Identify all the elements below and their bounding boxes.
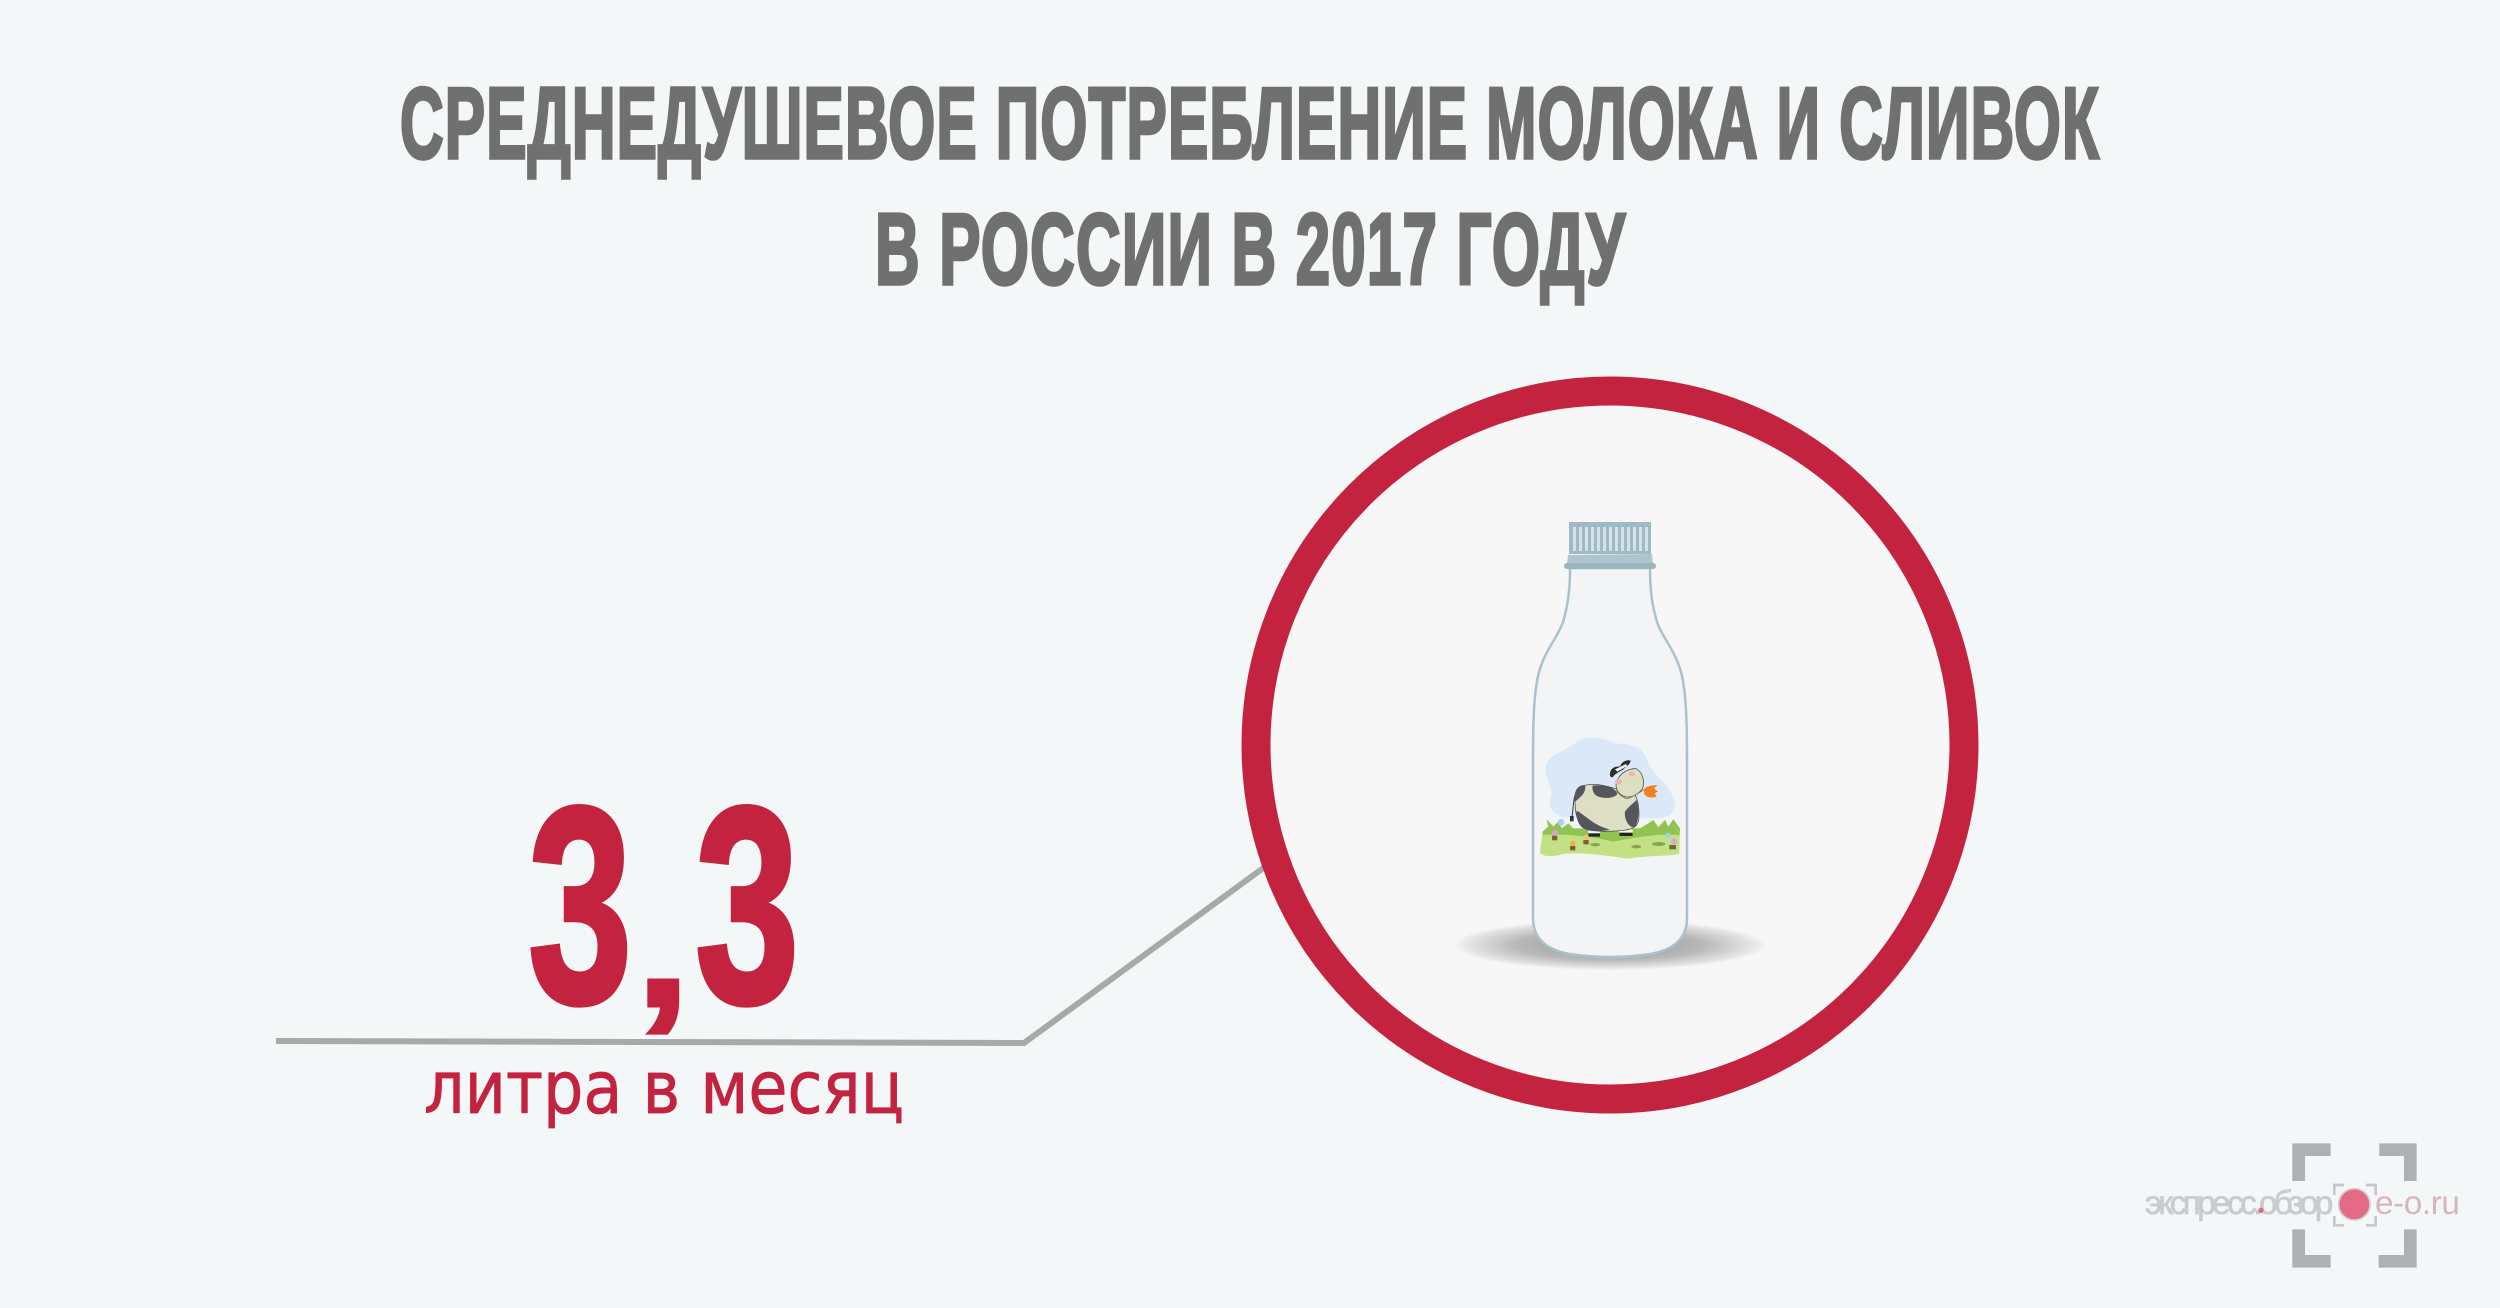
logo dot [2258,1208,2264,1213]
tail [1572,795,1575,818]
circle [1256,391,1964,1099]
connector line [276,866,1266,1043]
rope [1616,789,1645,798]
cow head [1616,769,1644,797]
logo inner corners [2334,1185,2376,1225]
tulip [1644,785,1658,797]
big number: 3 [695,748,799,1062]
title: В РОССИИ В 2017 ГОДУ [875,194,1626,306]
label: cow on meadow [1540,737,1680,859]
unit label: литра в месяц [424,1046,904,1131]
logo text: domain: e-o.ru [2375,1185,2460,1222]
cow spots [1575,785,1638,831]
logo frame corners [2292,1143,2417,1268]
cow hair [1610,760,1631,777]
watermark logo [2145,1143,2460,1268]
hooves [1588,829,1600,837]
bottle body [1533,568,1687,957]
bottle shadow [1455,920,1765,970]
icon: milk bottle [1455,522,1765,970]
bottle cap [1564,522,1656,569]
title [400,68,2100,306]
logo lens [2339,1189,2370,1220]
logo text: cyrillic: экспресс.обзор [2145,1185,2333,1222]
grass [1540,819,1680,859]
cow body [1575,784,1639,831]
big number [528,748,799,1062]
sky [1546,737,1675,818]
flowers [1558,819,1564,826]
big number: , [635,847,691,1043]
big number: 3 [528,748,632,1062]
